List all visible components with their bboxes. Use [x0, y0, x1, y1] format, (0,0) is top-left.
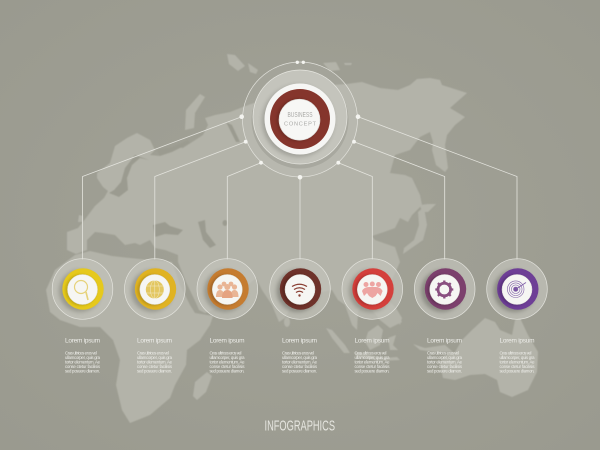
caption 4: tortor elementum. Ae [282, 360, 318, 364]
caption 3: ullamcorper, quis gra [210, 355, 245, 360]
sumatra [326, 328, 350, 353]
britain [78, 215, 83, 222]
caption 5: sed posuere diamon. [354, 368, 390, 374]
hub red ring [270, 89, 330, 149]
caption 7: sed posuere diamon. [500, 368, 534, 374]
caption 3: Cras ultrices eros vel [210, 350, 242, 356]
caption 6: Lorem ipsum [427, 337, 462, 344]
caption 4: ullamcorper, quis gra [282, 355, 318, 360]
ob gulf [226, 122, 240, 142]
icon: group of people [216, 282, 238, 298]
caption 4: sed posuere diamon. [282, 368, 317, 374]
caption 2: Lorem ipsum [137, 337, 172, 344]
caption 1 [65, 337, 101, 374]
caption 7 [500, 337, 535, 374]
japan [403, 207, 427, 254]
new guinea [413, 344, 453, 352]
caption 6 [427, 337, 463, 374]
caption 2: ullamcorper, quis gra [137, 355, 173, 360]
icon: wifi [292, 284, 307, 297]
caption 4: Cras ultrices eros vel [282, 350, 314, 356]
icon: gear [435, 280, 453, 298]
caption 1: ullamcorper, quis gra [65, 355, 101, 360]
caption 7: tortor elementum. Ae [500, 360, 535, 364]
caption 5: Lorem ipsum [354, 337, 390, 344]
novaya zemlya and arctic islands [185, 94, 205, 130]
node 1: search [52, 259, 113, 319]
caption 3 [210, 337, 245, 374]
caption 6: conse ctetur facilisis [427, 364, 462, 369]
caption 5: Cras ultrices eros vel [354, 350, 387, 356]
caption 3: sed posuere diamon. [210, 368, 244, 374]
hub shadow disc [252, 72, 348, 168]
africa [46, 251, 213, 423]
hub connector dots [239, 61, 360, 180]
caption 6: Cras ultrices eros vel [427, 350, 459, 356]
philippines [385, 302, 402, 325]
icon: target [507, 281, 526, 298]
node 4: wifi [270, 259, 330, 319]
sri lanka [284, 317, 290, 327]
caption 2: tortor elementum. Ae [137, 360, 173, 364]
caption 3: tortor elementum. Ae [210, 360, 245, 364]
caption 1: conse ctetur facilisis [65, 364, 100, 369]
caption 1: sed posuere diamon. [65, 368, 100, 374]
caption 1: Cras ultrices eros vel [65, 350, 97, 356]
node 2: globe [124, 259, 185, 319]
caption 1: tortor elementum. Ae [65, 360, 101, 364]
connector lines [82, 117, 517, 260]
captions [65, 337, 535, 374]
caption 6: sed posuere diamon. [427, 368, 462, 374]
caption 3: conse ctetur facilisis [210, 364, 244, 369]
caption 7: conse ctetur facilisis [500, 364, 534, 369]
hokkaido [420, 204, 436, 212]
caption 2 [137, 337, 173, 374]
hub drop shadow [262, 85, 334, 157]
icon: magnifier [74, 280, 88, 300]
java and lesser islands [354, 352, 400, 361]
caption 4 [282, 337, 318, 374]
borneo [365, 325, 383, 350]
gulf of finland and white sea [157, 140, 190, 156]
hub inner shadow [276, 98, 320, 142]
caption 5: tortor elementum. Ae [354, 360, 390, 364]
node 5: people [342, 259, 403, 319]
hub outer ring [242, 62, 358, 177]
caspian sea [198, 220, 216, 248]
caption 5: conse ctetur facilisis [354, 364, 390, 369]
australia [440, 318, 538, 397]
caption 7: Cras ultrices eros vel [500, 350, 532, 356]
caption 2: conse ctetur facilisis [137, 364, 172, 369]
world map [46, 54, 538, 423]
hub title: BUSINESS [288, 112, 313, 119]
madagascar [193, 372, 212, 400]
footer title: INFOGRAPHICS [264, 418, 335, 434]
caption 7: Lorem ipsum [500, 337, 534, 344]
caption 1: Lorem ipsum [65, 337, 100, 344]
node 7: target [487, 259, 547, 319]
caption 2: Cras ultrices eros vel [137, 350, 169, 356]
hub white center [279, 99, 320, 140]
aral sea [222, 220, 228, 226]
black sea [153, 222, 183, 237]
icon: three people [362, 282, 383, 298]
icon: globe [146, 280, 164, 298]
caption 6: tortor elementum. Ae [427, 360, 463, 364]
node 6: gear [414, 259, 475, 319]
sulawesi [388, 335, 398, 350]
caption 3: Lorem ipsum [210, 337, 244, 344]
eurasia [67, 78, 467, 330]
baltic sea [109, 155, 149, 197]
hub white ring [264, 84, 336, 154]
central hub [239, 61, 360, 180]
hub glass disc [253, 70, 347, 164]
caption 5: ullamcorper, quis gra [354, 355, 390, 360]
caption 4: conse ctetur facilisis [282, 364, 317, 369]
caption 6: ullamcorper, quis gra [427, 355, 463, 360]
caption 5 [354, 337, 390, 374]
node 3: team [197, 259, 258, 319]
caption 4: Lorem ipsum [282, 337, 317, 344]
caption 2: sed posuere diamon. [137, 368, 172, 374]
hub subtitle: CONCEPT [284, 122, 317, 128]
caption 7: ullamcorper, quis gra [500, 355, 535, 360]
